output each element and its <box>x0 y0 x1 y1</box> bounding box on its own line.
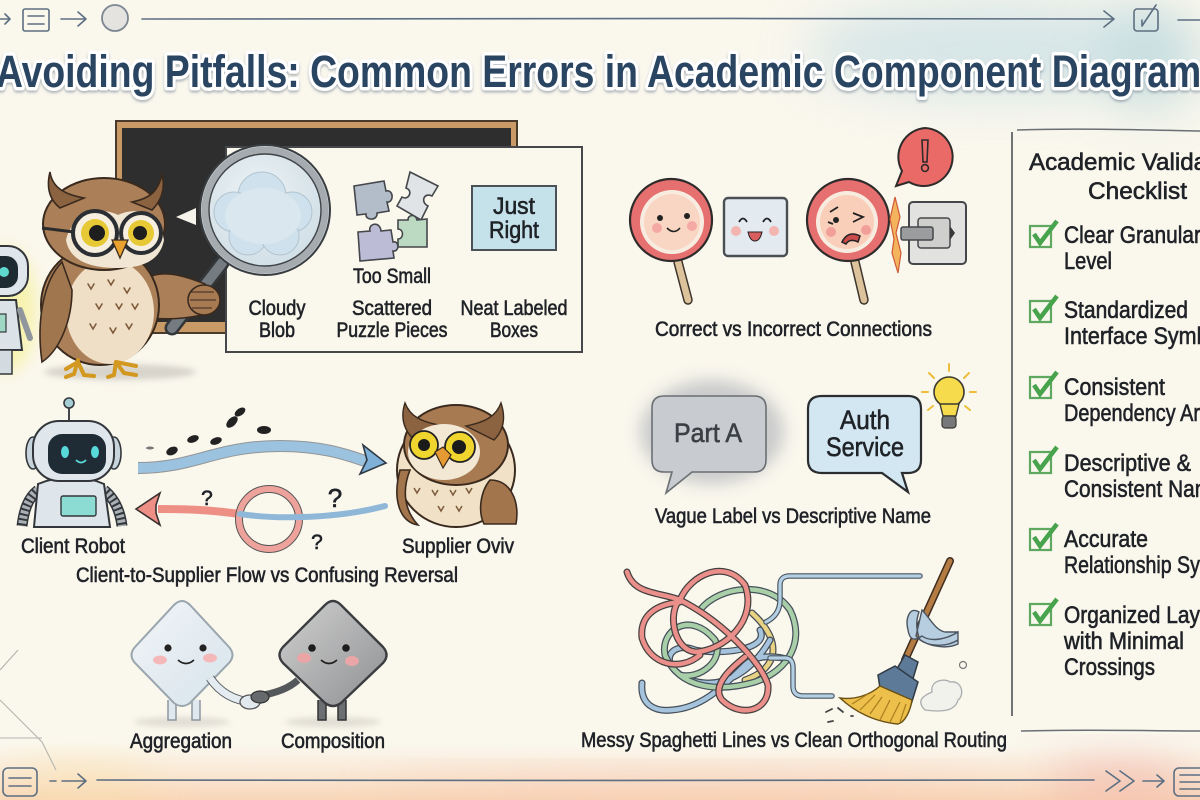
panel: aggregation and composition <box>130 601 386 753</box>
icons: question marks: ? <box>328 483 342 513</box>
icon: handshake arms <box>210 678 298 709</box>
icon: light bulb <box>922 364 976 428</box>
icon: grey diamond composition <box>280 601 386 720</box>
arrow: correct client to supplier flow <box>138 445 386 474</box>
icon: small glowing robot <box>0 246 36 374</box>
label: aggregation: Aggregation <box>130 730 232 753</box>
comparison card <box>226 147 582 352</box>
icons: question marks: ? <box>201 487 213 510</box>
icon: supplier owl <box>397 403 517 527</box>
icon: foggy speech bubble part A: Part A <box>674 418 742 448</box>
icons: question marks: ? <box>311 531 323 554</box>
panel: granularity with teacher owl <box>0 121 582 380</box>
label: scattered puzzle pieces: Scattered <box>352 297 432 320</box>
icon: broom and dust <box>826 561 966 724</box>
label: cloudy blob: Cloudy <box>248 297 306 320</box>
panel: correct vs incorrect connections <box>630 128 966 341</box>
caption: Correct vs Incorrect Connections <box>655 318 932 341</box>
icon: wall socket with plug <box>901 202 966 264</box>
checklist heading <box>1029 149 1200 205</box>
arrow: confusing reversed flow with loop <box>136 489 385 549</box>
icon: happy lollipop <box>630 179 712 300</box>
blackboard <box>116 121 517 333</box>
icon: clear speech bubble auth service <box>808 396 921 492</box>
icon: spark between lollipop and socket <box>890 197 901 273</box>
label: neat labeled boxes: Neat Labeled <box>460 297 568 320</box>
icon: happy square interface <box>724 198 787 256</box>
icon: sad lollipop <box>807 179 889 300</box>
icon: just right box: Right <box>489 217 539 244</box>
label: cloudy blob: Blob <box>259 319 295 342</box>
panel: client to supplier flow <box>21 398 517 587</box>
label: supplier owl: Supplier Oviv <box>402 535 514 558</box>
label: cloudy blob <box>248 297 306 342</box>
icon: tangled spaghetti lines <box>627 571 796 710</box>
checklist item 1 <box>1030 221 1200 275</box>
panel: academic validation checklist <box>1012 129 1200 731</box>
caption: Vague Label vs Descriptive Name <box>655 505 931 528</box>
caption: Client-to-Supplier Flow vs Confusing Reversal <box>76 564 458 587</box>
checklist item 3 <box>1030 372 1200 427</box>
label: scattered puzzle pieces <box>336 297 448 342</box>
icon: just right box: Just <box>493 193 535 220</box>
icons: question marks <box>201 483 342 554</box>
label: composition: Composition <box>281 730 385 753</box>
checklist item 5: Accurate <box>1064 526 1148 553</box>
icon: clear speech bubble auth service: Auth <box>840 405 890 435</box>
icon: white diamond aggregation <box>132 601 232 720</box>
icon: client robot <box>22 398 122 527</box>
checklist item 2 <box>1030 296 1200 350</box>
checklist item 6: Crossings <box>1064 654 1155 681</box>
icon: magnifying glass with cloudy blob <box>172 145 330 328</box>
label: too small: Too Small <box>353 265 431 288</box>
top border strip with icons and arrows <box>0 5 1200 31</box>
checklist heading: Checklist <box>1088 178 1187 205</box>
label: neat labeled boxes: Boxes <box>490 319 538 342</box>
icon: scattered puzzle pieces <box>354 172 438 261</box>
checklist item 4 <box>1030 447 1200 503</box>
icon: footprints <box>146 406 271 457</box>
checklist item 3: Consistent <box>1064 374 1165 401</box>
lines: clean orthogonal routing <box>766 576 920 696</box>
panel: vague label vs descriptive name <box>640 364 976 528</box>
icon: warning speech bubble <box>896 128 953 186</box>
checklist item 6: with Minimal <box>1063 628 1184 655</box>
checklist item 1: Level <box>1064 248 1112 275</box>
checklist item 6 <box>1030 599 1200 681</box>
icon: foggy speech bubble part A <box>640 380 784 493</box>
bottom border strip with icons and arrows <box>3 768 1200 796</box>
icon: just right box <box>472 186 556 250</box>
label: neat labeled boxes <box>460 297 568 342</box>
panel: spaghetti vs orthogonal routing <box>581 561 1007 752</box>
icon: teacher owl with glasses <box>40 172 220 380</box>
checklist item 5 <box>1030 524 1200 579</box>
icon: clear speech bubble auth service: Service <box>826 432 904 462</box>
caption: Messy Spaghetti Lines vs Clean Orthogonal Routing <box>581 729 1007 752</box>
label: client robot: Client Robot <box>21 535 125 558</box>
label: scattered puzzle pieces: Puzzle Pieces <box>336 319 448 342</box>
